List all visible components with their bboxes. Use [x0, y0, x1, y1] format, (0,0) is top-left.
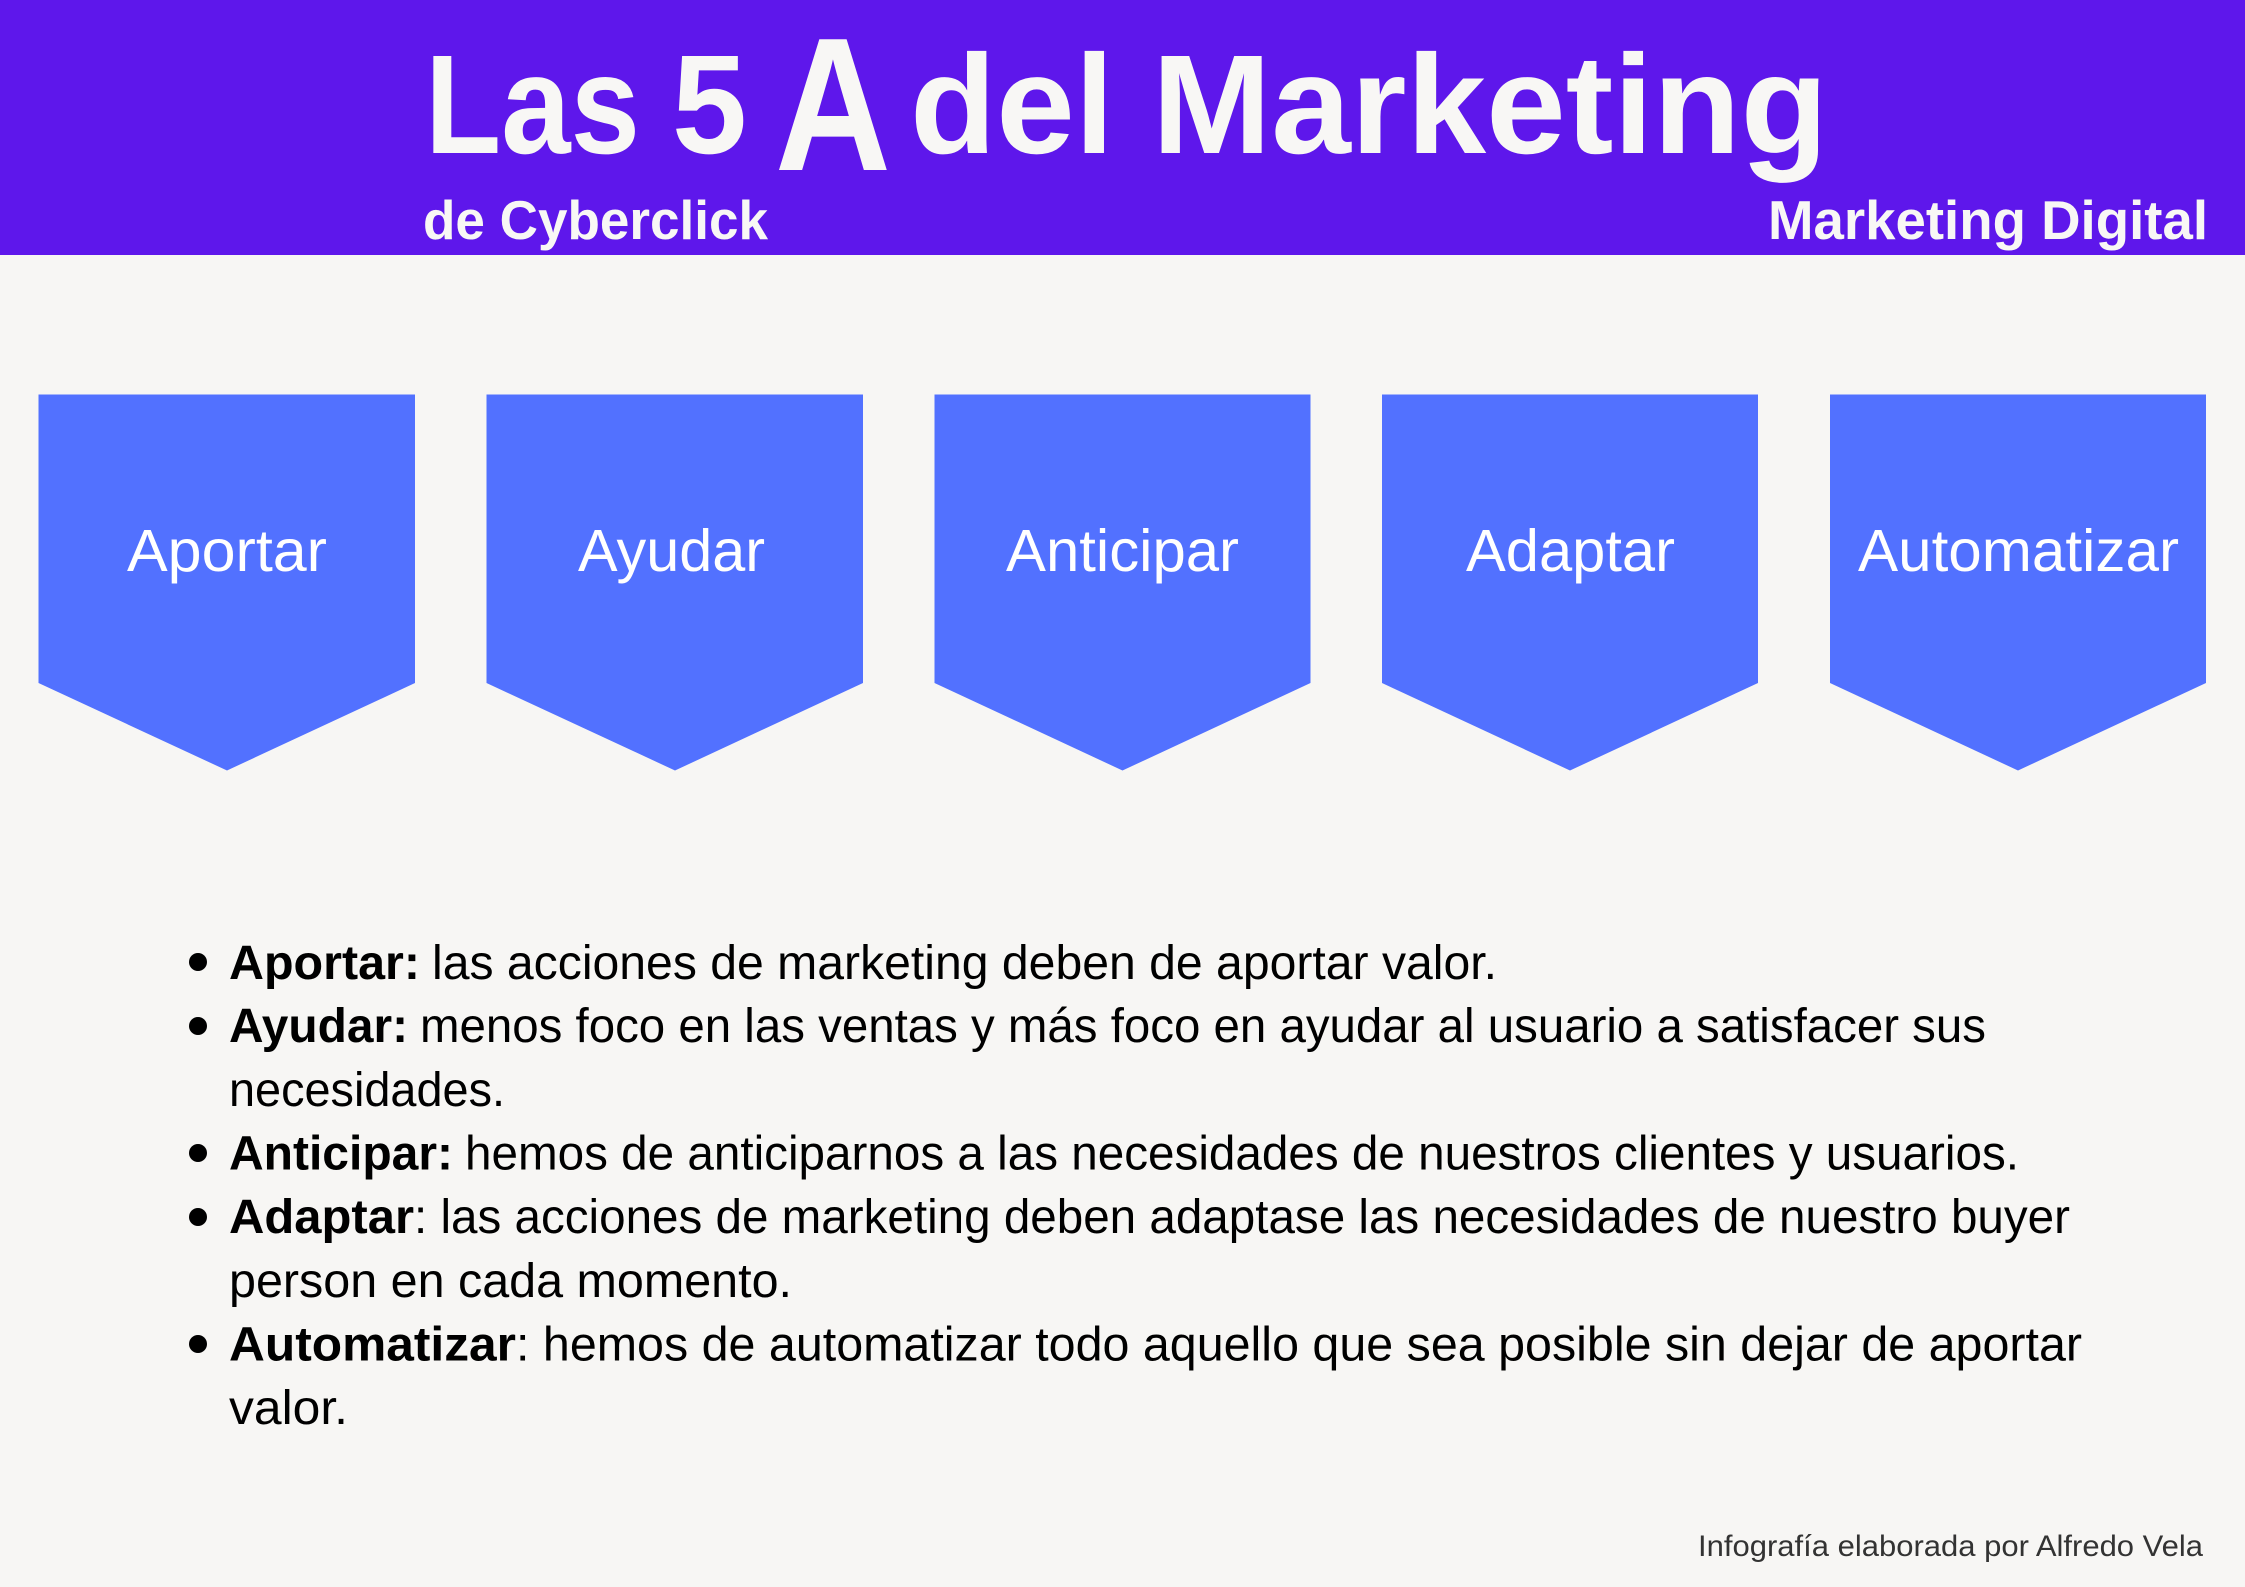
item: Anticipar: hemos de anticiparnos a las necesidades de nuestros clientes y usuarios.	[465, 1128, 2019, 1180]
item: Automatizar	[189, 1318, 2082, 1435]
footer credit: Infografía elaborada por Alfredo Vela	[1698, 1530, 2203, 1563]
pentagon: Aportar: Aportar	[127, 518, 327, 584]
title: del	[910, 25, 1114, 183]
item: Adaptar	[189, 1191, 2070, 1308]
subtitle: de Cyberclick: de Cyberclick	[423, 189, 768, 251]
item: Automatizar: : hemos de automatizar todo aquello que sea posible sin dejar de aportar	[516, 1318, 2082, 1372]
title: Las	[425, 25, 640, 183]
pentagon: Anticipar	[934, 394, 1310, 770]
title: 5	[672, 25, 747, 183]
bullet list	[189, 937, 2082, 1435]
item: Ayudar	[189, 1000, 1986, 1117]
item: Anticipar: Anticipar:	[229, 1128, 453, 1180]
pentagon: Aportar	[38, 394, 415, 770]
pentagon: Adaptar	[1382, 394, 1758, 770]
item: Aportar: Aportar:	[229, 937, 420, 990]
title: Marketing	[1152, 25, 1828, 183]
title: A	[775, 0, 891, 211]
item: Aportar: las acciones de marketing deben de aportar valor.	[432, 937, 1497, 990]
item: Automatizar: Automatizar	[229, 1318, 516, 1372]
pentagon: Ayudar	[486, 394, 863, 770]
pentagon: Automatizar: Automatizar	[1858, 518, 2179, 584]
title	[425, 0, 1828, 211]
item: Adaptar: Adaptar	[229, 1191, 414, 1244]
item: Ayudar: necesidades.	[229, 1064, 505, 1117]
item: Ayudar: Ayudar:	[229, 1000, 408, 1053]
pentagon: Automatizar	[1830, 394, 2206, 770]
pentagon: Ayudar: Ayudar	[578, 518, 765, 584]
item: Adaptar: : las acciones de marketing deben adaptase las necesidades de nuestro buyer	[414, 1191, 2070, 1244]
pentagon: Adaptar: Adaptar	[1466, 518, 1675, 584]
item: Ayudar: menos foco en las ventas y más foco en ayudar al usuario a satisfacer sus	[420, 1000, 1986, 1053]
pentagon: Anticipar: Anticipar	[1006, 518, 1239, 584]
item: Adaptar: person en cada momento.	[229, 1255, 792, 1308]
subtitle: Marketing Digital: Marketing Digital	[1768, 189, 2208, 251]
item: Automatizar: valor.	[229, 1382, 348, 1435]
header banner	[0, 0, 2245, 255]
